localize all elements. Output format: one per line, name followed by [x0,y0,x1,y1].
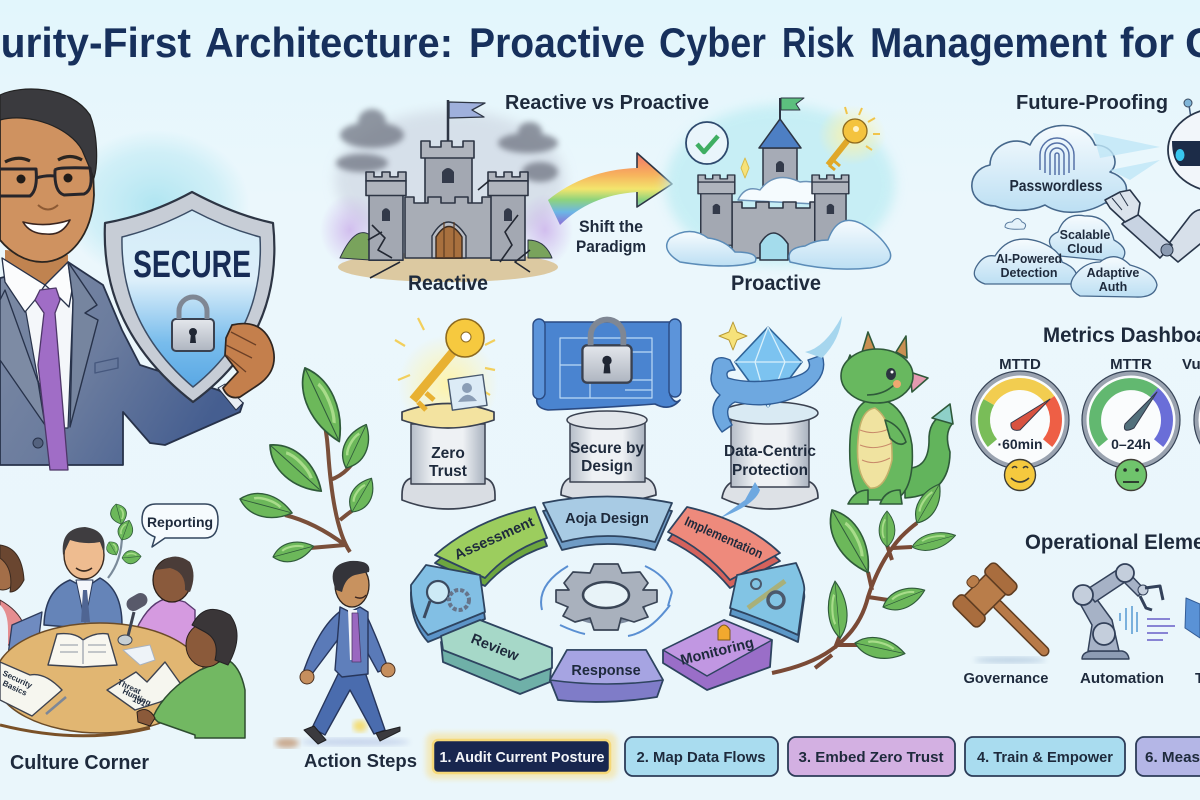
title: for [1120,19,1174,66]
shirt cuff [218,384,243,410]
pillar text: Secure by [570,440,644,457]
head [335,563,369,607]
head [0,116,94,262]
forearm [1122,212,1172,258]
right book: 101 [131,695,148,709]
plinth [561,478,656,502]
cloud: AI detection [974,239,1077,284]
cone keep [763,148,797,193]
cloud: adaptive auth: Adaptive [1087,266,1139,280]
golden key [828,107,880,170]
sprout [104,502,142,578]
tree: growth branch right [772,479,958,673]
shirt [2,258,73,428]
plinth [722,482,818,509]
key [413,352,453,400]
cloud: scalable: Scalable [1060,228,1110,242]
arm [885,420,906,444]
ring: implementation segment: Implementation [682,514,765,561]
jacket [335,607,368,677]
cracks [368,180,530,278]
rays [395,318,495,395]
shield padlock [172,297,214,351]
cloud: adaptive auth [1071,257,1157,297]
button: step 2: 2. Map Data Flows [636,749,766,766]
wall and arch [732,202,815,258]
suit jacket [0,262,243,465]
tail [905,414,952,498]
sparkle [741,158,749,178]
pillar: Secure by Design [533,319,681,502]
process cycle [411,496,804,702]
gauge: MTTD: ·60min [997,436,1043,452]
label: Culture Corner: Culture Corner [10,752,149,774]
section: Future-Proofing heading: Future-Proofing [1016,91,1168,114]
lapels [0,290,45,425]
label: Reactive: Reactive [408,272,488,295]
gauge: MTTD: MTTD [999,356,1041,373]
cloud: AI detection: Detection [1001,266,1057,280]
label: Automation: Automation [1080,671,1164,687]
curtain wall [405,197,492,258]
woman left [0,545,24,650]
cloud: adaptive auth: Auth [1099,280,1127,294]
ring: assessment segment [435,507,547,586]
button: step 4 [965,737,1125,776]
pillar: Data-Centric Protection [711,316,842,518]
ring: response segment [550,650,663,702]
feet [848,490,868,504]
green flag [779,98,781,119]
title: Management [870,19,1107,66]
title: Cyber [659,19,766,66]
gauge: MTTD [971,356,1069,490]
ring: response segment: Response [571,663,641,679]
ring: review segment [441,620,552,694]
pillar: Zero Trust: Trust [429,463,467,480]
button: step 6 (cropped) [1136,737,1200,776]
figure: walking executive [275,561,410,748]
neck [5,250,68,288]
label: Shift the Paradigm [576,218,646,256]
ears [846,355,856,365]
gate [432,222,466,258]
pillar text: Data-Centric [724,443,816,460]
legs [312,670,385,735]
arrow: rainbow paradigm shift [548,153,672,225]
right book [107,662,185,710]
label: Proactive: Proactive [731,272,821,295]
table [0,623,205,733]
section: Reactive vs Proactive heading: Reactive vs Proactive [505,92,709,114]
beams [1093,133,1160,180]
flag [447,100,449,141]
hair [0,89,97,178]
ground [338,252,558,282]
ring: assessment segment: Assessment [452,514,537,564]
ribbon [711,355,824,432]
ring: assess icon block [411,565,485,642]
label: Action Steps: Action Steps [304,750,417,771]
title [0,19,1200,66]
badge [448,375,487,410]
button: step 3: 3. Embed Zero Trust [798,749,944,766]
button: step 3 [788,737,955,776]
ring: tools icon block [730,563,804,642]
right book: Hunting [121,687,152,708]
sun glow [818,105,886,165]
icon: robot arm [1073,564,1175,659]
button: step 1: 1. Audit Current Posture [440,749,604,766]
left tablet [8,612,42,655]
hands [300,670,314,684]
mascot: green dragon [841,332,953,504]
keep [425,150,472,210]
label: Shift the Paradigm: Shift the [579,218,643,236]
speech bubble: Reporting [147,514,213,530]
right book: Threat [116,678,142,696]
hand [1105,190,1140,222]
paper, pen and left hand [123,645,155,665]
towers [366,172,406,260]
eyes and mouth [16,174,26,184]
plinth [402,478,495,509]
pillar: Data-Centric Protection: Protection [732,462,808,479]
base clouds [667,232,756,266]
label: Shift the Paradigm: Paradigm [576,238,646,256]
head [841,349,913,403]
center book [48,634,117,667]
ring: monitoring segment: Monitoring [679,635,756,669]
cloud: scalable: Cloud [1067,242,1103,256]
padlock [582,320,632,383]
check badge [686,122,728,164]
left book [0,662,62,716]
left book: Basics [1,679,29,698]
gauge: MTTR: 0–24h [1111,436,1151,452]
fingerprint [1040,138,1074,175]
label: Governance: Governance [964,671,1048,687]
hand [223,324,274,398]
speech bubble [142,504,218,547]
title: Architecture: [205,19,453,66]
left book: Security [1,669,34,690]
man in navy suit [44,527,122,628]
cloud: scalable [1049,215,1125,262]
tree: growth branch left [237,362,380,566]
ring: implementation segment [668,507,780,588]
pillar text: Zero [431,445,465,462]
head [1168,108,1200,192]
illustration: reactive castle [320,100,573,282]
icon: gavel [948,558,1046,663]
ring: monitoring segment [663,620,772,690]
icon: small clouds [974,215,1157,297]
gauge: Vulnerabilities (cropped) [1182,356,1200,469]
illustration: culture corner team [0,502,245,738]
icon: training item (cropped) [1185,598,1200,638]
arms [304,610,345,674]
pillar: Zero Trust [395,318,498,509]
ring: review segment: Review [468,631,521,665]
cloud: AI detection: AI-Powered [996,252,1062,266]
gauge: MTTR [1082,356,1180,490]
body [850,398,912,500]
jacket button [33,438,43,448]
man in green [137,609,245,738]
illustration: CISO holding shield [0,89,274,470]
button: step 4: 4. Train & Empower [977,749,1113,766]
title: Proactive [469,19,645,66]
ring: design segment: Aoja Design [565,511,649,527]
storm clouds [336,109,558,182]
glasses [0,168,91,196]
center gear [556,564,657,630]
ring: design segment [543,496,672,550]
shirt collar [2,258,72,312]
gauge: MTTR: MTTR [1110,356,1152,373]
button: step 2 [625,737,778,776]
button: step 1 [426,733,617,779]
upper arm [1164,210,1200,262]
upper cloud [738,178,835,205]
antenna [1189,105,1192,125]
pillar: Secure by Design: Design [581,458,633,475]
cycle arrows [541,566,672,636]
crystal [735,327,802,407]
shield [105,192,274,402]
blueprint [537,322,680,410]
towers [698,175,735,245]
title: Risk [782,19,855,66]
horns [862,332,907,358]
pocket [95,358,118,373]
shield label: SECURE [133,244,251,286]
illustration: proactive castle [665,98,895,269]
icon: big passwordless cloud [972,125,1126,212]
microphone [118,590,150,645]
icon: big passwordless cloud: Passwordless [1010,178,1102,195]
woman in lilac [136,557,195,655]
mascot: robot [1093,99,1200,262]
tie [35,288,68,470]
